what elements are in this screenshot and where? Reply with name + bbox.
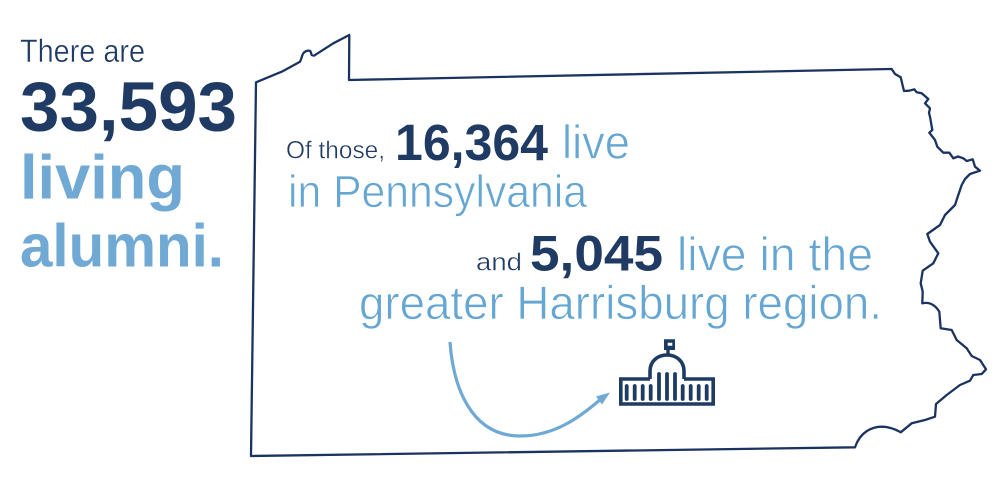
heading: There are: There are xyxy=(20,33,145,69)
text: greater Harrisburg region.: greater Harrisburg region. xyxy=(359,276,882,329)
text: in Pennsylvania: in Pennsylvania xyxy=(288,166,588,217)
text: live in the: live in the xyxy=(677,228,873,280)
heading: living: living xyxy=(20,144,185,212)
map: Pennsylvania outline xyxy=(251,35,986,456)
text: Of those,: Of those, xyxy=(286,136,385,164)
text: and: and xyxy=(476,248,522,276)
statistic: 5,045: 5,045 xyxy=(530,226,663,282)
statistic: 16,364: 16,364 xyxy=(395,114,549,171)
icon: capitol building xyxy=(621,339,713,404)
statistic: 33,593: 33,593 xyxy=(20,68,237,146)
arrow: curved pointer to capitol xyxy=(450,342,610,436)
text: live: live xyxy=(562,116,630,168)
heading: alumni.: alumni. xyxy=(20,212,224,280)
